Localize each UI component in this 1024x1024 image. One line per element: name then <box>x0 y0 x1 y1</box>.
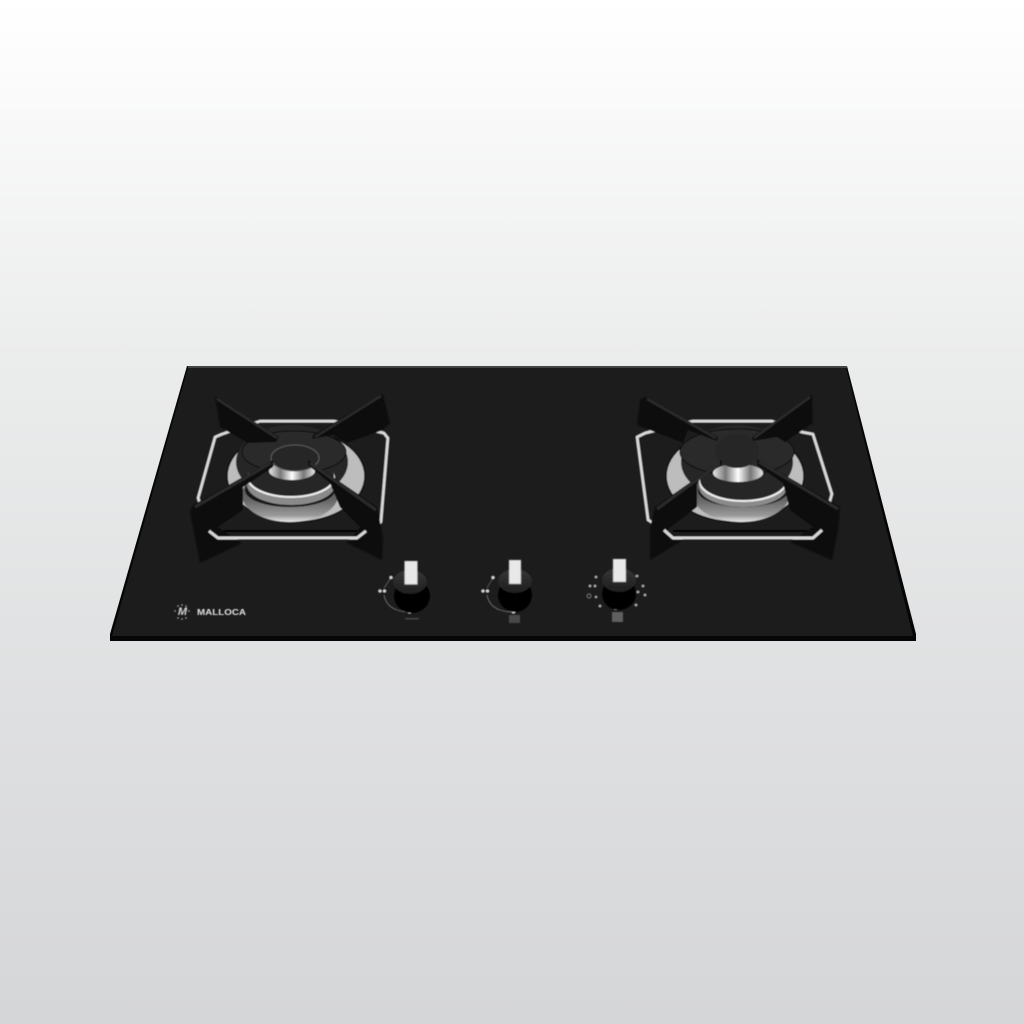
left tray front rim <box>209 531 366 538</box>
left burner lower crown <box>245 456 335 507</box>
left pan support arm: bottom-right <box>308 460 383 560</box>
left burner steel tray frame <box>198 421 388 538</box>
left burner inner dish <box>236 425 348 499</box>
right tray inner shadow line <box>673 530 815 532</box>
right burner steel tray frame <box>637 421 832 538</box>
knob top <box>602 568 636 592</box>
right pan support arm: bottom-left <box>650 460 722 560</box>
right burner metal collar <box>713 464 763 482</box>
knob indicator <box>613 559 626 582</box>
centre control knob <box>481 560 532 623</box>
left tray inner shadow line <box>216 530 358 532</box>
left pan support arm: bottom-left <box>190 460 273 563</box>
left burner cap <box>271 445 319 471</box>
knob scale markings <box>378 576 419 620</box>
knob body <box>394 579 430 613</box>
right burner silver ring <box>666 430 804 522</box>
right pan support arm: bottom-right <box>757 459 840 560</box>
right burner inner dish <box>681 425 793 499</box>
timer scale markings <box>587 574 646 622</box>
left pan support arm: top-left <box>215 397 279 443</box>
right control knob <box>587 559 646 622</box>
left burner metal collar <box>269 462 315 480</box>
right burner cap <box>715 434 759 468</box>
knob indicator <box>404 561 418 584</box>
right tray front rim <box>664 530 822 538</box>
knob indicator <box>509 560 521 584</box>
knob top <box>393 570 427 594</box>
right burner upper disc <box>680 429 794 475</box>
knob body <box>498 578 532 612</box>
knob body <box>602 578 636 610</box>
right burner assembly <box>637 395 840 560</box>
left burner bottom crescent <box>242 468 338 522</box>
logo emblem: M <box>178 606 188 618</box>
left burner silver ring <box>227 430 365 522</box>
brand name: MALLOCA <box>197 608 246 617</box>
brand logo <box>174 604 246 620</box>
right burner lower crown <box>698 460 788 507</box>
left pan support arm: top-right <box>312 394 390 443</box>
left control knob <box>378 561 430 620</box>
right burner bottom crescent <box>693 468 789 522</box>
left burner upper disc <box>242 431 346 473</box>
panel: black glass cooktop <box>110 366 916 641</box>
right pan support arm: top-right <box>752 395 813 442</box>
right pan support arm: top-left <box>637 397 718 443</box>
left burner assembly <box>190 394 390 563</box>
knob scale markings <box>481 576 520 623</box>
knob top <box>498 569 532 593</box>
